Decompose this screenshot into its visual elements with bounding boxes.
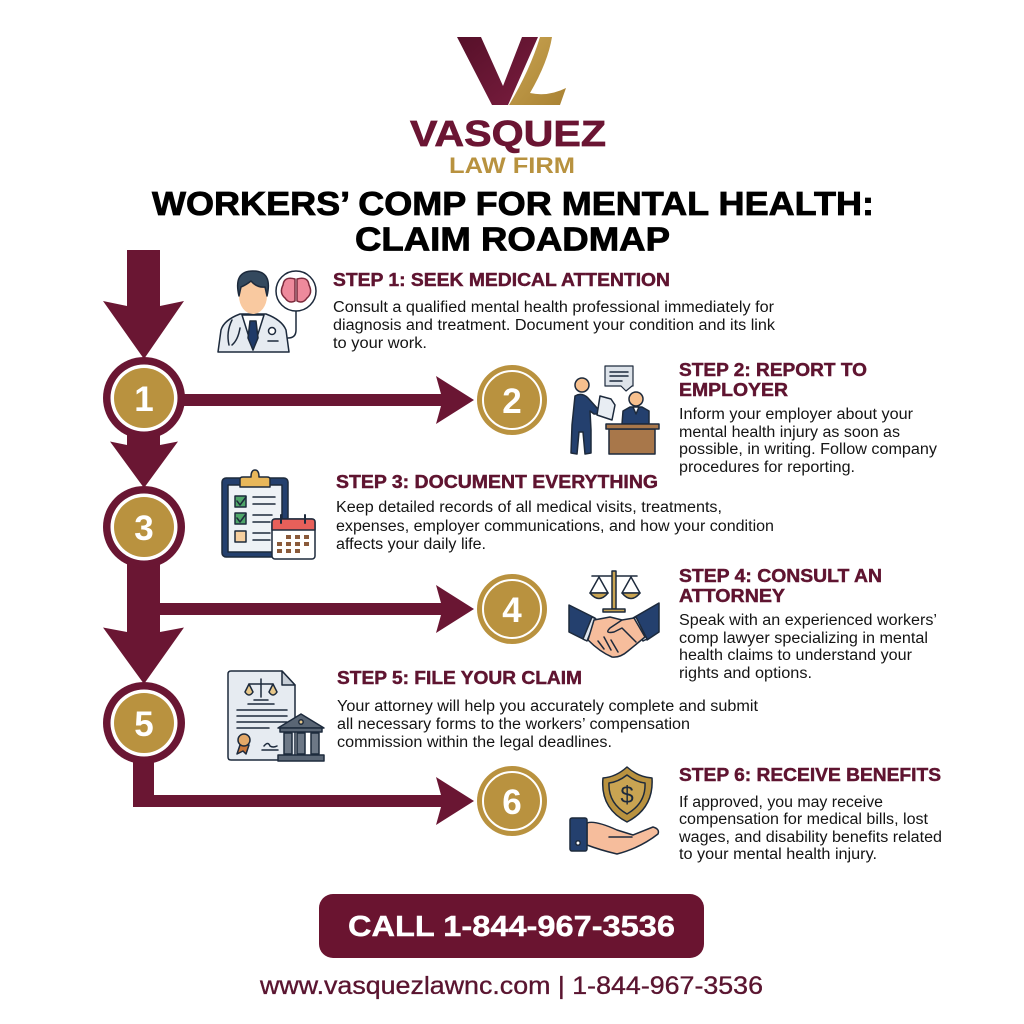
step 1 description: Consult a qualified mental health professional immediately for: [333, 299, 774, 316]
icon: checklist clipboard and calendar: [222, 470, 315, 559]
step 1 text: [333, 270, 775, 352]
step marker 2: 2: [502, 382, 522, 421]
step 5 description: Your attorney will help you accurately complete and submit: [337, 698, 759, 715]
step marker 2: [477, 365, 547, 435]
step 4 description: Speak with an experienced workers’: [679, 612, 937, 629]
title: CLAIM ROADMAP: [355, 220, 670, 258]
step 6 description: to your mental health injury.: [679, 846, 877, 863]
step marker 4: [477, 574, 547, 644]
step 1 description: to your work.: [333, 335, 427, 352]
step 4 description: [679, 612, 937, 682]
step 3 text: [336, 472, 774, 553]
step 1 heading: STEP 1: SEEK MEDICAL ATTENTION: [333, 270, 670, 290]
step 2 heading: EMPLOYER: [679, 380, 788, 400]
step 5 description: [337, 698, 759, 751]
step marker 4: 4: [502, 591, 522, 630]
arrow: step 5 to step 6: [133, 755, 474, 825]
step 6 text: [678, 765, 942, 863]
arrow: step 3 to step 4: [155, 585, 474, 633]
icon: employee reporting to employer: [571, 366, 659, 454]
step 5 description: commission within the legal deadlines.: [337, 734, 612, 751]
step 4 heading: STEP 4: CONSULT AN: [679, 566, 882, 586]
step 5 description: all necessary forms to the workers’ compensation: [337, 716, 690, 733]
step 6 description: wages, and disability benefits related: [678, 829, 942, 846]
step marker 5: [103, 682, 185, 764]
step 2 heading: [679, 360, 867, 400]
title: WORKERS’ COMP FOR MENTAL HEALTH:: [152, 185, 874, 222]
step 4 description: rights and options.: [679, 665, 812, 682]
icon: doctor with brain: [218, 271, 316, 352]
step 5 heading: STEP 5: FILE YOUR CLAIM: [337, 668, 582, 688]
icon: scales of justice and handshake: [569, 571, 659, 657]
step marker 1: 1: [134, 380, 154, 419]
step 4 heading: [679, 566, 882, 606]
step 6 description: compensation for medical bills, lost: [679, 811, 929, 828]
step 1 description: [333, 299, 775, 352]
logo mark: VL monogram: [457, 37, 566, 105]
step 3 description: Keep detailed records of all medical visits, treatments,: [336, 499, 722, 516]
step 2 heading: STEP 2: REPORT TO: [679, 360, 867, 380]
arrow: step 1 to step 3: [110, 430, 178, 488]
step 2 description: mental health injury as soon as: [679, 424, 900, 441]
icon: legal document and courthouse: [228, 671, 324, 761]
logo: Vasquez Law Firm: [410, 37, 606, 178]
step 2 description: [679, 406, 937, 476]
step marker 5: 5: [134, 705, 154, 744]
title: [152, 185, 874, 258]
step 4 description: comp lawyer specializing in mental: [679, 630, 928, 647]
step 5 text: [337, 668, 759, 751]
logo wordmark: Law Firm: LAW FIRM: [449, 153, 575, 178]
step 2 description: procedures for reporting.: [679, 459, 855, 476]
step 2 description: Inform your employer about your: [679, 406, 913, 423]
step 3 description: expenses, employer communications, and how your condition: [336, 518, 774, 535]
step 3 description: [336, 499, 774, 553]
step 3 description: affects your daily life.: [336, 536, 486, 553]
step 6 description: If approved, you may receive: [679, 794, 883, 811]
step 2 description: possible, in writing. Follow company: [679, 441, 937, 458]
footer contact line: www.vasquezlawnc.com | 1-844-967-3536: [259, 972, 763, 1000]
step 6 heading: STEP 6: RECEIVE BENEFITS: [679, 765, 941, 785]
step 1 description: diagnosis and treatment. Document your condition and its link: [333, 317, 775, 334]
arrow: step 1 to step 2: [180, 376, 474, 424]
step marker 3: [103, 486, 185, 568]
icon: hand receiving benefits shield: [570, 767, 658, 854]
logo wordmark: Vasquez: VASQUEZ: [410, 113, 606, 154]
step 4 text: [679, 566, 937, 682]
arrow: start to step 1: [103, 250, 184, 359]
step marker 6: 6: [502, 783, 522, 822]
step marker 6: [477, 766, 547, 836]
step 4 description: health claims to understand your: [679, 647, 912, 664]
step marker 3: 3: [134, 509, 154, 548]
step 6 description: [678, 794, 942, 863]
icon: hand receiving benefits shield: $: [620, 782, 634, 809]
step marker 1: [103, 357, 185, 439]
arrow: step 3 to step 5: [103, 560, 184, 684]
step 2 text: [679, 360, 937, 476]
roadmap arrows: [103, 250, 474, 825]
call button: [319, 894, 704, 958]
step 3 heading: STEP 3: DOCUMENT EVERYTHING: [336, 472, 658, 492]
call button: CALL 1-844-967-3536: [348, 911, 675, 943]
step 4 heading: ATTORNEY: [679, 586, 785, 606]
